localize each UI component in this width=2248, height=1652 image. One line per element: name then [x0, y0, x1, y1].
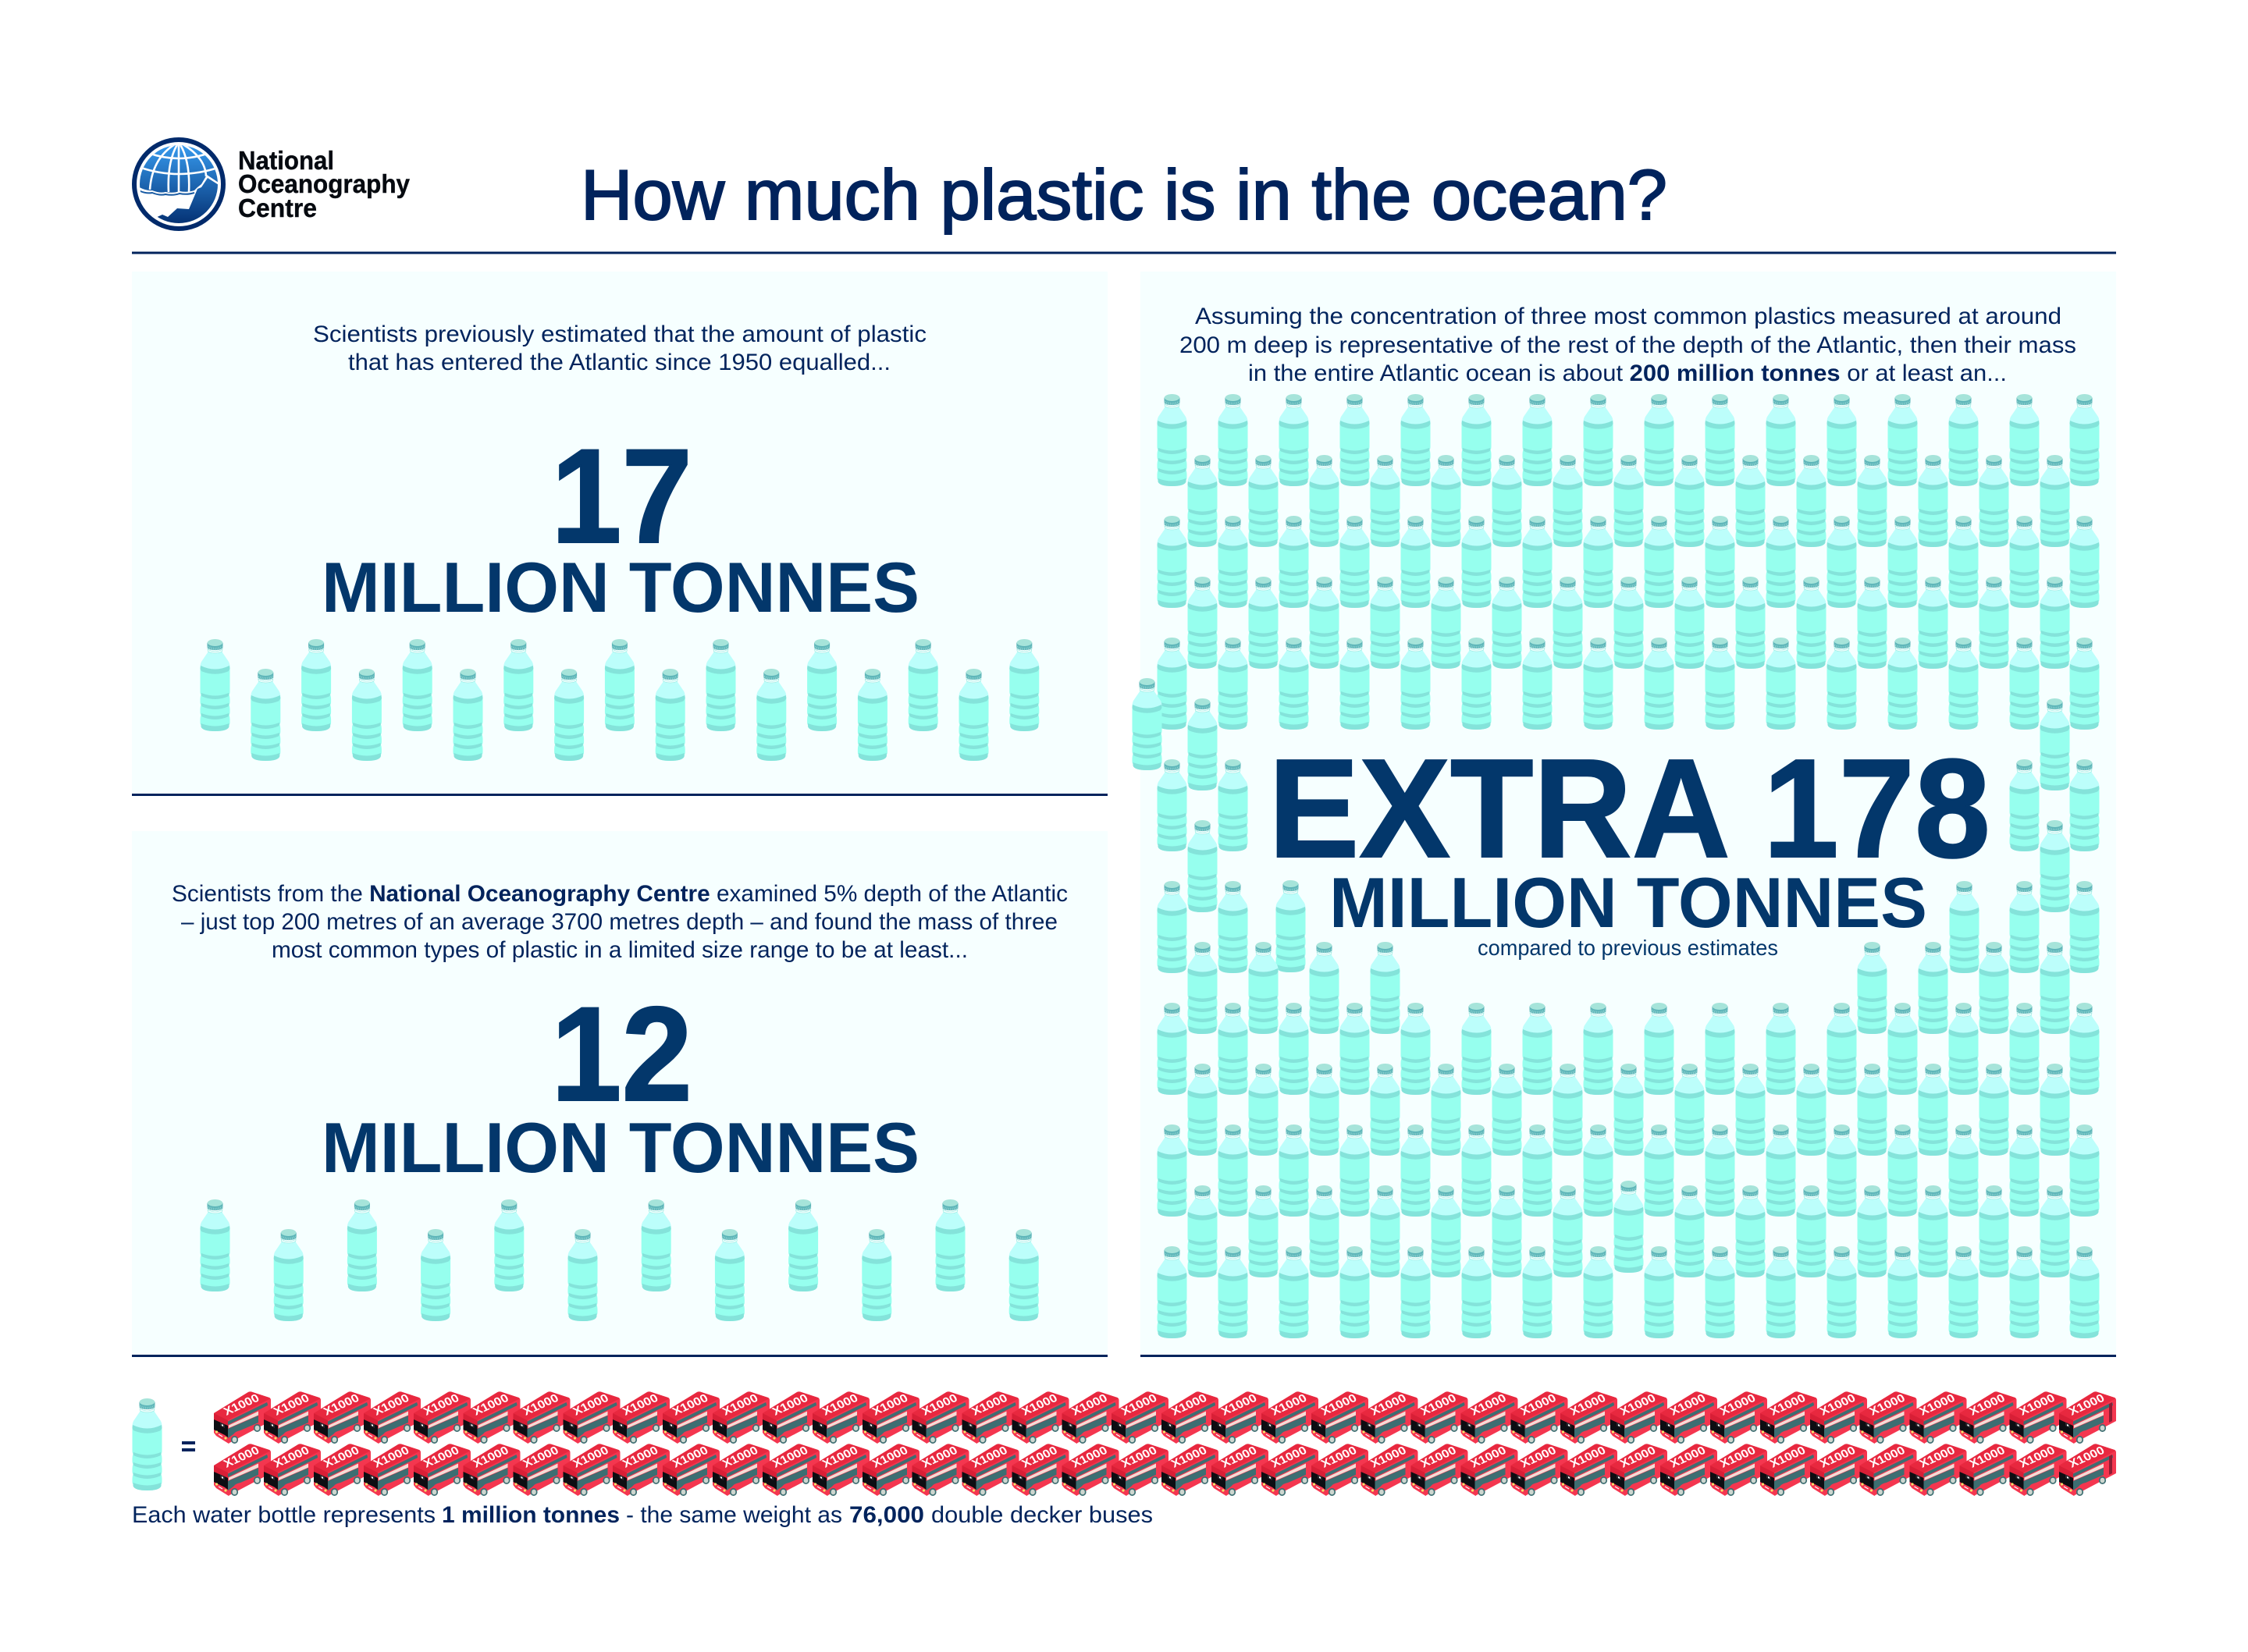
panel text: previous estimate: that has entered the Atlantic since 1950 equalled... — [348, 350, 891, 375]
logo wordmark: Oceanography — [238, 169, 411, 198]
bus grid: each bus is x1000: X1000 — [1768, 1444, 1809, 1470]
bus grid: each bus is x1000: X1000 — [1468, 1444, 1509, 1470]
bus grid: each bus is x1000: X1000 — [1319, 1444, 1360, 1470]
bus grid: each bus is x1000 — [214, 1391, 2116, 1496]
bus grid: each bus is x1000: X1000 — [1818, 1392, 1859, 1418]
panel text: Atlantic extrapolation: Assuming the concentration of three most common plastics measured at around — [1195, 304, 2061, 329]
bus grid: each bus is x1000: X1000 — [820, 1392, 861, 1418]
bus grid: each bus is x1000: X1000 — [1169, 1444, 1210, 1470]
bus grid: each bus is x1000: X1000 — [2017, 1444, 2058, 1470]
bus grid: each bus is x1000: X1000 — [1069, 1392, 1110, 1418]
bus grid: each bus is x1000: X1000 — [1219, 1444, 1260, 1470]
panel text: previous estimate: Scientists previously estimated that the amount of plastic — [313, 322, 927, 347]
bus grid: each bus is x1000: X1000 — [1867, 1444, 1908, 1470]
bus grid: each bus is x1000: X1000 — [1269, 1444, 1310, 1470]
bus grid: each bus is x1000: X1000 — [1668, 1392, 1709, 1418]
bus grid: each bus is x1000: X1000 — [670, 1444, 711, 1470]
bus grid: each bus is x1000: X1000 — [2067, 1444, 2108, 1470]
panel text: Atlantic extrapolation — [1179, 304, 2076, 386]
bus grid: each bus is x1000: X1000 — [471, 1444, 511, 1470]
bus grid: each bus is x1000: X1000 — [1019, 1392, 1060, 1418]
bus grid: each bus is x1000: X1000 — [1917, 1392, 1958, 1418]
bus grid: each bus is x1000: X1000 — [1518, 1392, 1559, 1418]
icon: legend bottle — [133, 1398, 162, 1490]
bus grid: each bus is x1000: X1000 — [272, 1444, 312, 1470]
bus grid: each bus is x1000: X1000 — [1069, 1444, 1110, 1470]
bus grid: each bus is x1000: X1000 — [1867, 1392, 1908, 1418]
bus grid: each bus is x1000: X1000 — [372, 1392, 412, 1418]
bus grid: each bus is x1000: X1000 — [969, 1392, 1010, 1418]
bus grid: each bus is x1000: X1000 — [720, 1392, 761, 1418]
legend caption: - the same weight as — [626, 1502, 842, 1528]
panel text: NOC measurement: most common types of plastic in a limited size range to be at least... — [272, 937, 968, 963]
logo wordmark: National — [238, 146, 334, 175]
bottle row: 12 bottles — [200, 1199, 1039, 1321]
bus grid: each bus is x1000: X1000 — [1967, 1444, 2008, 1470]
panel text: NOC measurement — [172, 881, 1068, 963]
legend: one bottle equals 76,000 buses — [132, 1391, 2116, 1528]
bus grid: each bus is x1000: X1000 — [1418, 1392, 1459, 1418]
bus grid: each bus is x1000: X1000 — [770, 1444, 811, 1470]
big number 17: 17 — [551, 421, 692, 571]
million tonnes label: MILLION TONNES — [322, 1109, 919, 1188]
bus grid: each bus is x1000: X1000 — [1418, 1444, 1459, 1470]
bus grid: each bus is x1000: X1000 — [1568, 1444, 1609, 1470]
bus grid: each bus is x1000: X1000 — [670, 1392, 711, 1418]
bus grid: each bus is x1000: X1000 — [919, 1392, 960, 1418]
bus grid: each bus is x1000: X1000 — [621, 1392, 661, 1418]
bus grid: each bus is x1000: X1000 — [621, 1444, 661, 1470]
bus grid: each bus is x1000: X1000 — [471, 1392, 511, 1418]
bus grid: each bus is x1000: X1000 — [571, 1444, 611, 1470]
panel text: Atlantic extrapolation: 200 m deep is representative of the rest of the depth of the Atlantic, then their mass — [1179, 332, 2076, 358]
bus grid: each bus is x1000: X1000 — [571, 1392, 611, 1418]
bus grid: each bus is x1000: X1000 — [521, 1444, 561, 1470]
legend caption: double decker buses — [931, 1502, 1153, 1528]
bus grid: each bus is x1000: X1000 — [820, 1444, 861, 1470]
bus grid: each bus is x1000: X1000 — [422, 1444, 462, 1470]
logo wordmark: Centre — [238, 194, 317, 222]
bus grid: each bus is x1000: X1000 — [272, 1392, 312, 1418]
bus grid: each bus is x1000: X1000 — [2017, 1392, 2058, 1418]
bus grid: each bus is x1000: X1000 — [1618, 1444, 1659, 1470]
bus grid: each bus is x1000: X1000 — [222, 1392, 262, 1418]
panel text: NOC measurement: Scientists from the National Oceanography Centre examined 5% depth of the Atlantic — [172, 881, 1068, 907]
panel text: previous estimate — [313, 322, 927, 375]
bus grid: each bus is x1000: X1000 — [1269, 1392, 1310, 1418]
bus grid: each bus is x1000: X1000 — [1967, 1392, 2008, 1418]
bus grid: each bus is x1000: X1000 — [969, 1444, 1010, 1470]
bus grid: each bus is x1000: X1000 — [1917, 1444, 1958, 1470]
bus grid: each bus is x1000: X1000 — [1019, 1444, 1060, 1470]
logo wordmark — [238, 146, 411, 222]
panel text: Atlantic extrapolation: in the entire Atlantic ocean is about 200 million tonnes or at least an... — [1248, 361, 2007, 386]
bus grid: each bus is x1000: X1000 — [322, 1392, 362, 1418]
bus grid: each bus is x1000: X1000 — [372, 1444, 412, 1470]
bus grid: each bus is x1000: X1000 — [870, 1392, 911, 1418]
bus grid: each bus is x1000: X1000 — [1518, 1444, 1559, 1470]
panel: NOC measurement 12 million tonnes — [132, 831, 1108, 1357]
equals sign — [182, 1441, 195, 1451]
header logo: National Oceanography Centre — [133, 133, 411, 231]
bus grid: each bus is x1000: X1000 — [1668, 1444, 1709, 1470]
bus grid: each bus is x1000: X1000 — [1169, 1392, 1210, 1418]
bus grid: each bus is x1000: X1000 — [1368, 1392, 1409, 1418]
bottle field: 200 million tonnes — [1132, 394, 2100, 1338]
bus grid: each bus is x1000: X1000 — [1368, 1444, 1409, 1470]
big number 12: 12 — [551, 979, 692, 1129]
bus grid: each bus is x1000: X1000 — [1119, 1444, 1160, 1470]
bus grid: each bus is x1000: X1000 — [1618, 1392, 1659, 1418]
bus grid: each bus is x1000: X1000 — [1568, 1392, 1609, 1418]
legend caption: 76,000 — [849, 1502, 924, 1528]
bus grid: each bus is x1000: X1000 — [1768, 1392, 1809, 1418]
legend caption: Each water bottle represents — [132, 1502, 436, 1528]
bus grid: each bus is x1000: X1000 — [422, 1392, 462, 1418]
bus grid: each bus is x1000: X1000 — [770, 1392, 811, 1418]
title: How much plastic is in the ocean? — [581, 156, 1667, 235]
legend caption: 1 million tonnes — [442, 1502, 620, 1528]
bus grid: each bus is x1000: X1000 — [1718, 1392, 1759, 1418]
bus grid: each bus is x1000: X1000 — [1319, 1392, 1360, 1418]
bus grid: each bus is x1000: X1000 — [1718, 1444, 1759, 1470]
big number EXTRA 178: EXTRA 178 — [1268, 730, 1990, 887]
bus grid: each bus is x1000: X1000 — [919, 1444, 960, 1470]
bus grid: each bus is x1000: X1000 — [1468, 1392, 1509, 1418]
bottle row: 17 bottles — [200, 639, 1039, 761]
icon: globe and wave emblem — [133, 133, 226, 231]
bus grid: each bus is x1000: X1000 — [720, 1444, 761, 1470]
million tonnes label: MILLION TONNES — [322, 549, 919, 627]
comparison note: compared to previous estimates — [1478, 936, 1778, 960]
bus grid: each bus is x1000: X1000 — [521, 1392, 561, 1418]
bus grid: each bus is x1000: X1000 — [322, 1444, 362, 1470]
legend caption — [132, 1502, 1153, 1528]
bus grid: each bus is x1000: X1000 — [2067, 1392, 2108, 1418]
bus grid: each bus is x1000: X1000 — [1119, 1392, 1160, 1418]
panel: previous estimate 17 million tonnes — [132, 272, 1108, 796]
million tonnes label: MILLION TONNES — [1329, 864, 1927, 943]
bus grid: each bus is x1000: X1000 — [1818, 1444, 1859, 1470]
panel: extra 178 million tonnes — [1132, 272, 2116, 1357]
bus grid: each bus is x1000: X1000 — [1219, 1392, 1260, 1418]
panel text: NOC measurement: – just top 200 metres of an average 3700 metres depth – and found the mass of three — [181, 909, 1058, 935]
bus grid: each bus is x1000: X1000 — [870, 1444, 911, 1470]
bus grid: each bus is x1000: X1000 — [222, 1444, 262, 1470]
